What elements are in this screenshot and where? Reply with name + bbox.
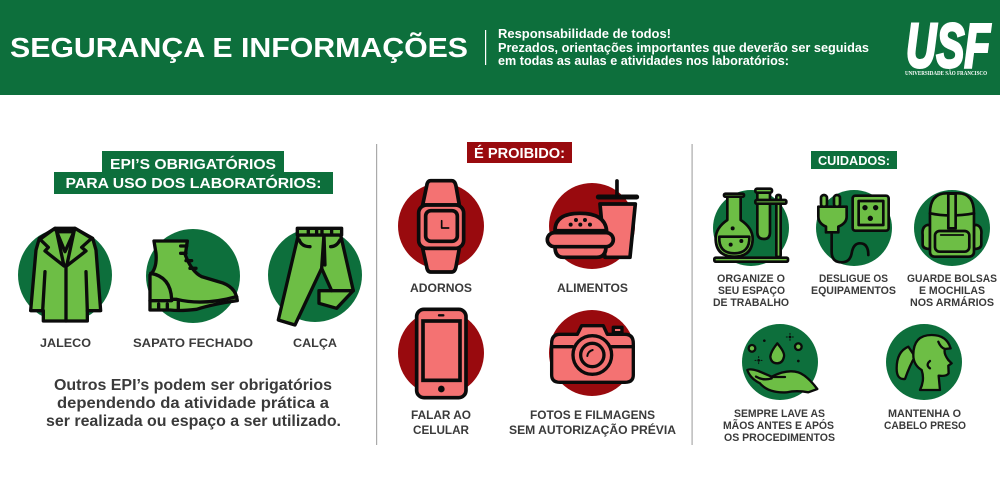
label: organize: ORGANIZE O — [717, 273, 785, 285]
icon: tomada — [816, 190, 892, 266]
label: alimentos: ALIMENTOS — [557, 281, 628, 295]
text block: outros EPIs — [46, 377, 341, 430]
label: cabelo preso: MANTENHA O — [888, 408, 961, 420]
text block: outros EPIs: ser realizada ou espaço a ser utilizado. — [46, 413, 341, 430]
text block: outros EPIs: Outros EPI’s podem ser obrigatórios — [54, 377, 332, 394]
label: organize: SEU ESPAÇO — [718, 285, 785, 297]
heading: EPIs obrigatórios: PARA USO DOS LABORATÓRIOS: — [66, 174, 322, 192]
title: SEGURANÇA E INFORMAÇÕES — [10, 32, 468, 63]
label: falar ao celular: FALAR AO — [411, 408, 471, 422]
label: cabelo preso: CABELO PRESO — [884, 420, 966, 432]
label: guarde bolsas — [907, 273, 997, 309]
label: guarde bolsas: NOS ARMÁRIOS — [910, 296, 994, 309]
label: guarde bolsas: GUARDE BOLSAS — [907, 273, 997, 285]
header intro text — [498, 27, 869, 68]
label: desligue: EQUIPAMENTOS — [811, 285, 896, 297]
heading: cuidados: CUIDADOS: — [818, 153, 890, 168]
icon: vidraria de laboratório — [713, 189, 789, 266]
icon: alimentos — [547, 181, 637, 269]
label: organize — [713, 273, 789, 309]
label: organize: DE TRABALHO — [713, 297, 789, 309]
label: guarde bolsas: E MOCHILAS — [919, 285, 985, 297]
icon: sapato fechado — [146, 229, 240, 323]
header divider — [485, 30, 486, 65]
header intro text: Prezados, orientações importantes que deverão ser seguidas — [498, 41, 869, 55]
label: lave as mãos: SEMPRE LAVE AS — [734, 408, 825, 420]
label: lave as mãos: OS PROCEDIMENTOS — [724, 432, 835, 444]
text block: outros EPIs: dependendo da atividade prática a — [57, 395, 329, 412]
label: lave as mãos: MÃOS ANTES E APÓS — [723, 419, 834, 432]
label: calça: CALÇA — [293, 336, 337, 350]
heading: EPIs obrigatórios: EPI’S OBRIGATÓRIOS — [110, 155, 276, 173]
header intro text: Responsabilidade de todos! — [498, 27, 671, 41]
heading: EPIs obrigatórios — [54, 151, 333, 194]
label: fotos e filmagens: FOTOS E FILMAGENS — [530, 408, 655, 422]
label: adornos: ADORNOS — [410, 281, 472, 295]
label: sapato fechado: SAPATO FECHADO — [133, 336, 253, 350]
label: desligue: DESLIGUE OS — [819, 273, 888, 285]
label: fotos e filmagens: SEM AUTORIZAÇÃO PRÉVIA — [509, 422, 676, 437]
icon: calça — [268, 228, 362, 325]
label: desligue — [811, 273, 896, 297]
icon: celular — [398, 309, 484, 398]
heading: é proibido: É PROIBIDO: — [474, 145, 565, 162]
icon: lavar as mãos — [742, 324, 818, 400]
label: fotos e filmagens — [509, 408, 676, 437]
icon: câmera — [549, 310, 635, 396]
label: falar ao celular — [411, 408, 471, 437]
label: lave as mãos — [723, 408, 835, 444]
header band — [0, 0, 1000, 95]
label: cabelo preso — [884, 408, 966, 432]
icon: cabelo preso — [886, 324, 962, 400]
panel: é proibido — [398, 142, 676, 437]
label: jaleco: JALECO — [40, 336, 91, 350]
header intro text: em todas as aulas e atividades nos laboratórios: — [498, 54, 789, 68]
label: falar ao celular: CELULAR — [413, 423, 469, 437]
icon: mochila — [914, 190, 990, 266]
panel: cuidados — [713, 151, 997, 444]
icon: relógio — [398, 181, 484, 272]
panel: EPIs obrigatórios — [18, 151, 362, 430]
icon: jaleco — [18, 228, 112, 322]
